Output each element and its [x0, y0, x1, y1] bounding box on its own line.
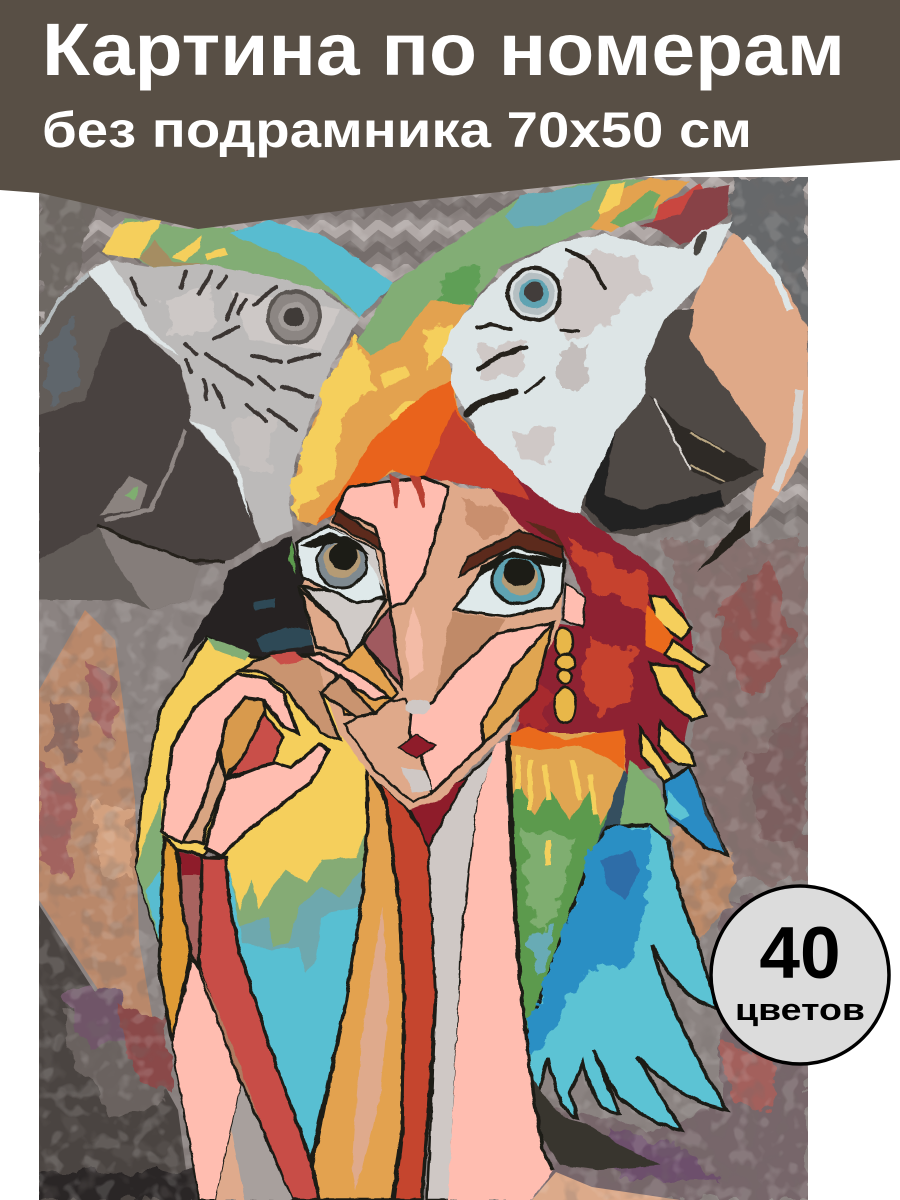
- left macaw crest yellow: [102, 220, 162, 259]
- title: Картина по номерам: [42, 8, 845, 91]
- left yellow feather: [136, 637, 300, 947]
- left macaw feather marks: [131, 272, 319, 430]
- rainbow cape: [509, 727, 672, 1093]
- background mottling: [39, 177, 808, 1200]
- left macaw lower beak: [97, 525, 200, 610]
- orange cheek wedge: [482, 623, 553, 743]
- ear: [562, 583, 585, 627]
- right eyebrow: [459, 530, 564, 577]
- orange wedge under nose: [335, 643, 398, 715]
- left macaw crest blue: [229, 220, 394, 317]
- badge: 40 colours: цветов: [735, 992, 865, 1027]
- left macaw crest green: [110, 218, 362, 320]
- face: [288, 477, 585, 810]
- right macaw crown strong orange: [316, 380, 480, 524]
- tan chin: [345, 700, 432, 802]
- cyan wing: [527, 825, 727, 1130]
- right macaw crest green: [356, 179, 663, 356]
- red drape right: [375, 777, 436, 1200]
- painting: woman with two macaws: [39, 177, 810, 1200]
- gray chest panel: [427, 750, 497, 1200]
- tan cheek and nose column: [394, 487, 521, 700]
- feather tips right: [640, 595, 708, 790]
- left eye: [288, 525, 385, 603]
- right macaw white face: [442, 222, 732, 514]
- left macaw dark beak: [39, 320, 262, 566]
- black hair left: [182, 535, 320, 663]
- thumb: [205, 745, 329, 857]
- right macaw crown orange: [292, 300, 470, 525]
- hair red: [424, 410, 695, 775]
- mauve nose shadow: [363, 607, 402, 687]
- left eyebrow: [333, 510, 381, 550]
- right macaw dark beak: [580, 310, 766, 536]
- chin highlight: [400, 767, 432, 792]
- raised arm finger: [162, 673, 298, 842]
- left macaw: [39, 218, 394, 610]
- dark rim below wing: [530, 1075, 660, 1170]
- upper fingers: [239, 653, 390, 740]
- hand: [162, 652, 390, 857]
- subtitle: без подрамника 70х50 см: [42, 102, 752, 158]
- right macaw beak hook: [697, 510, 750, 572]
- lips: [398, 735, 436, 759]
- left macaw head shadow: [39, 274, 262, 610]
- dark red neckline: [409, 777, 467, 847]
- right macaw crest teal: [505, 183, 600, 228]
- ring of fingers interior: [220, 698, 266, 780]
- gray cheek wedge: [300, 590, 352, 657]
- painting background: [39, 177, 808, 1200]
- right macaw upper beak: [689, 232, 810, 529]
- upper finger tip over face: [306, 653, 390, 700]
- orange drape: [312, 767, 404, 1200]
- long red strip left: [199, 857, 319, 1200]
- forehead: [337, 477, 448, 607]
- right macaw: [292, 178, 810, 572]
- blue tail feather: [664, 767, 727, 855]
- orange left strip: [159, 838, 191, 1042]
- badge: 40 colours: 40: [759, 913, 841, 994]
- header band: [0, 0, 900, 229]
- right eye: [455, 547, 564, 617]
- right macaw nostril: [693, 231, 708, 256]
- nose tip: [406, 699, 430, 715]
- left macaw eye: [266, 289, 322, 345]
- mauve strip: [179, 850, 202, 967]
- pale leg: [172, 960, 292, 1200]
- left macaw white face: [89, 260, 359, 544]
- right macaw feather marks: [467, 250, 605, 414]
- badge: 40 colours: [711, 886, 889, 1064]
- large multicolor wing: [225, 693, 367, 1160]
- earring: [554, 628, 576, 723]
- right macaw eye: [508, 268, 560, 320]
- pink torso: [448, 740, 553, 1200]
- right macaw crest colored tips: [590, 178, 690, 232]
- woman figure: [136, 410, 727, 1200]
- face underlay: [300, 480, 565, 810]
- pink palm cheek: [409, 623, 553, 793]
